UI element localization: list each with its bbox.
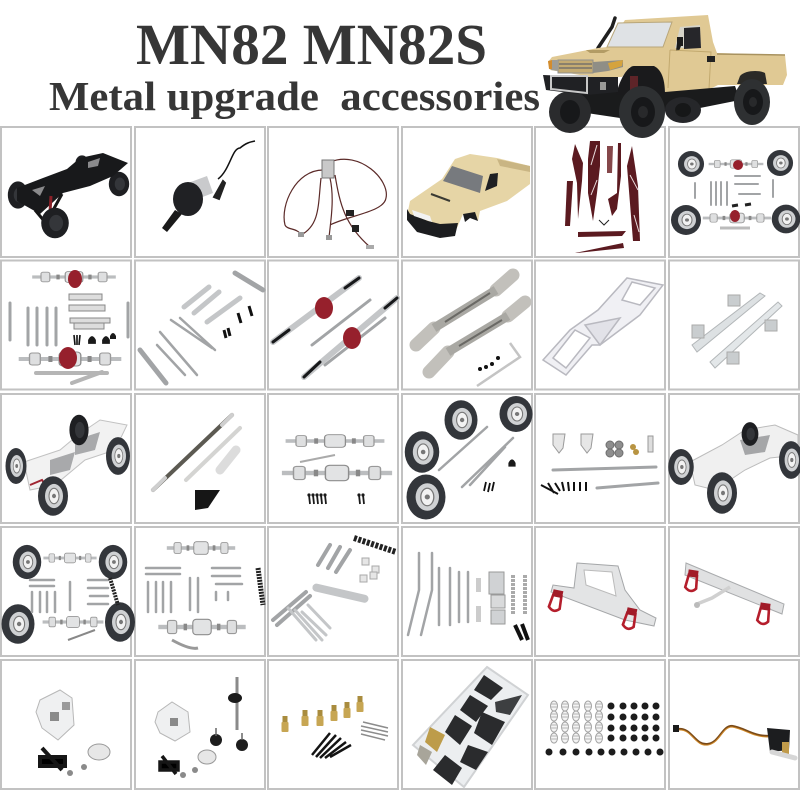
product: full kit with blue-grey wheels bbox=[1, 545, 135, 644]
product: axles and links kit bbox=[146, 542, 263, 648]
product: leaf springs and shocks bbox=[408, 553, 528, 640]
hero: rear far tire bbox=[665, 97, 701, 123]
product: rear bumper with tow hook bbox=[685, 563, 784, 625]
hero: underbody bbox=[575, 86, 740, 118]
product: assembled axles pair bbox=[273, 278, 397, 377]
product: brass hex posts and screws bbox=[282, 696, 388, 758]
hero image: tan pickup truck bbox=[543, 15, 787, 138]
hero: front far tire bbox=[549, 91, 591, 133]
product: tan truck body bbox=[407, 154, 530, 238]
product: portal axles bbox=[282, 435, 392, 504]
title: MN82 MN82S: MN82 MN82S bbox=[136, 12, 487, 77]
product: front bumper with red shackles bbox=[548, 563, 656, 630]
product: diagonal shocks and links bbox=[273, 538, 396, 640]
product: micro servo with wire bbox=[673, 725, 795, 758]
product: full axle kit with wheels bbox=[671, 150, 800, 235]
subtitle: Metal upgrade accessories: Metal upgrade accessories bbox=[49, 73, 540, 119]
product: springs and black plugs bbox=[546, 701, 664, 756]
product: steering cups and tie rods bbox=[541, 434, 658, 494]
product: motor gearbox bbox=[162, 141, 255, 232]
product: wheels and suspension set bbox=[405, 396, 532, 520]
product: housing with shaft and gears bbox=[155, 677, 248, 778]
product: LED wire harness bbox=[284, 159, 386, 249]
product: diagonal link set bbox=[140, 273, 263, 383]
product: metal driveshafts bbox=[416, 275, 525, 386]
product: silver chassis with wheels bbox=[6, 415, 130, 516]
product: transfer case housing with screws bbox=[36, 690, 110, 776]
hero: rear near tire bbox=[734, 79, 770, 125]
product: white chassis frame bbox=[543, 278, 663, 375]
product: silver side steps bbox=[692, 293, 782, 368]
product: black rolling chassis bbox=[8, 153, 129, 238]
hero: black bumper bbox=[543, 75, 618, 95]
product: steering rods and servo arm bbox=[153, 415, 240, 510]
product: axle link kit with red diffs bbox=[10, 270, 128, 383]
product: screw assortment box bbox=[413, 667, 528, 787]
product: silver chassis close crop bbox=[668, 422, 800, 514]
hero: front wheel arch bbox=[616, 66, 665, 95]
product: dark red decal set bbox=[565, 141, 640, 253]
hero: front near tire bbox=[619, 86, 665, 138]
hero: grille bbox=[558, 60, 593, 73]
